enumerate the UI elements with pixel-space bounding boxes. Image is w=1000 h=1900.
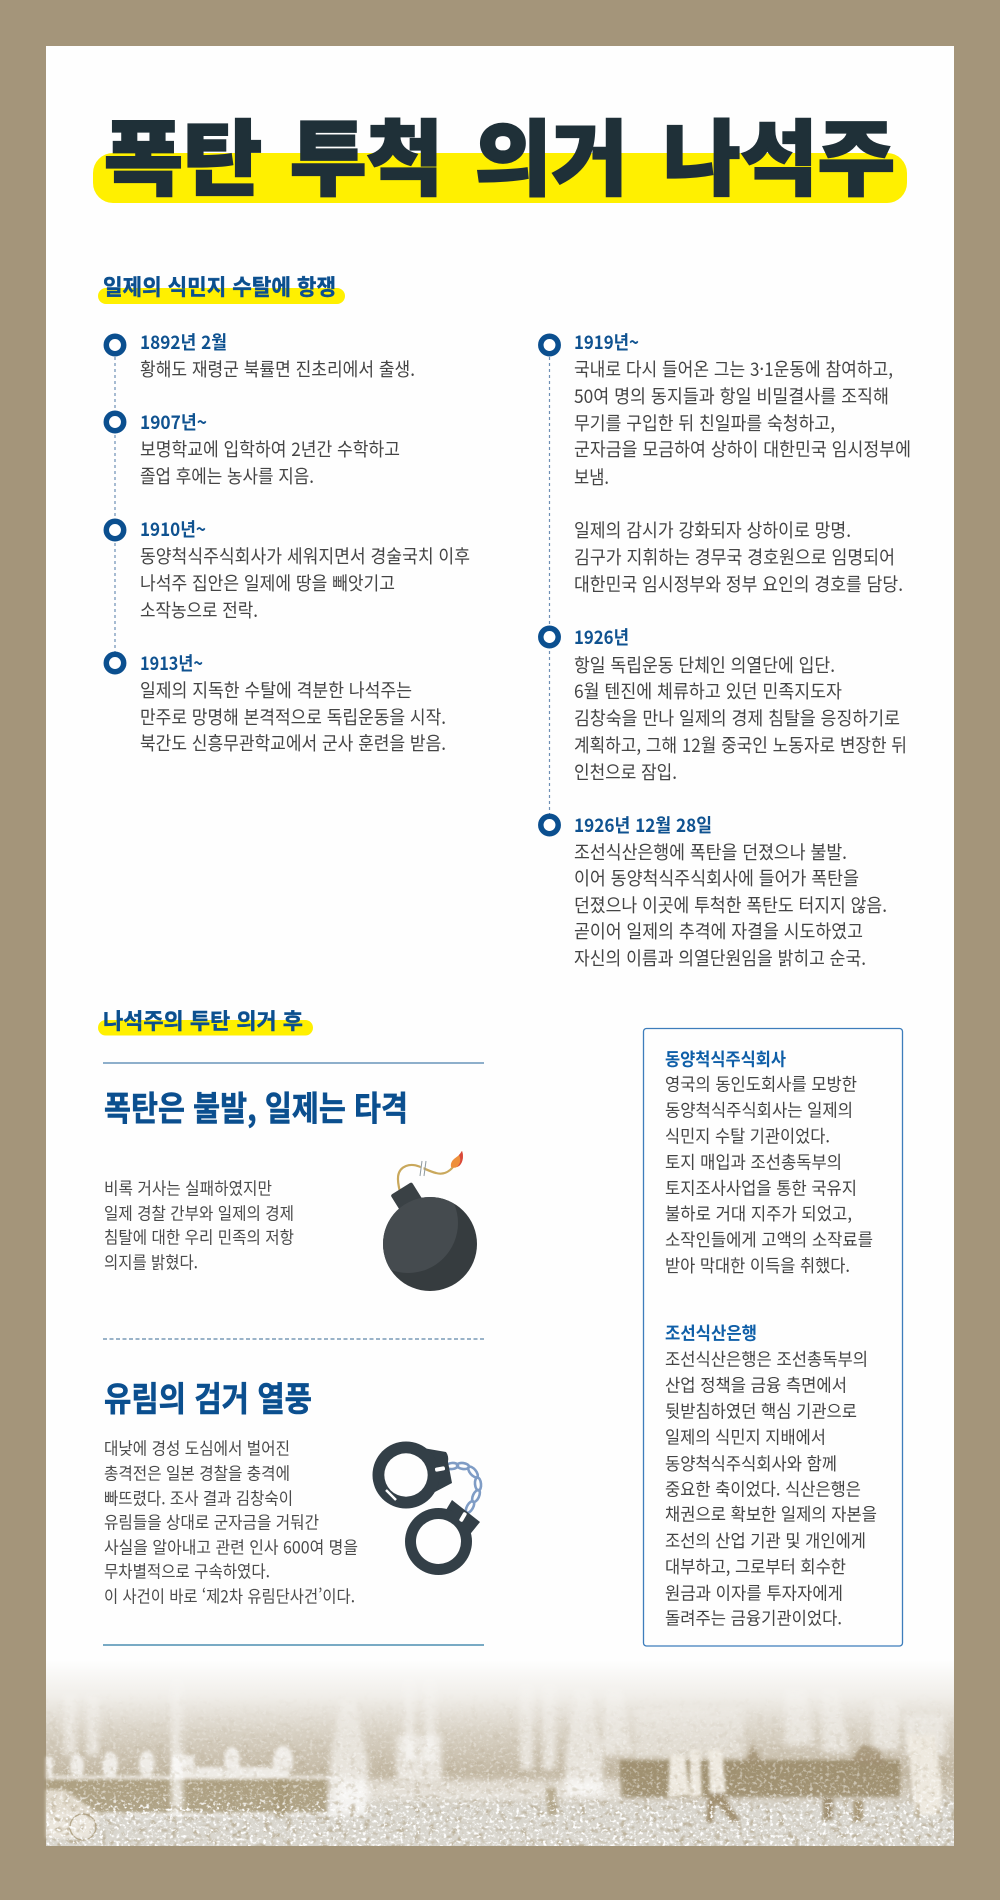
timeline item: 1907: 보명학교에 입학하여 2년간 수학하고 bbox=[140, 436, 400, 462]
timeline item: 1926-12-28: 곧이어 일제의 추격에 자결을 시도하였고 bbox=[574, 918, 863, 944]
glossary: Chosen Industrial Bank: 원금과 이자를 투자자에게 bbox=[665, 1580, 843, 1606]
timeline item: 1926: 6월 텐진에 체류하고 있던 민족지도자 bbox=[574, 678, 842, 704]
timeline item: 1919: 보냄. bbox=[574, 464, 609, 490]
text block: 유림들을 상대로 군자금을 거둬간 bbox=[104, 1508, 319, 1534]
mottling bbox=[46, 1717, 954, 1846]
timeline item: 1926-12-28: 자신의 이름과 의열단원임을 밝히고 순국. bbox=[574, 945, 866, 971]
timeline item: 1926: 항일 독립운동 단체인 의열단에 입단. bbox=[574, 652, 835, 678]
text block: 대낮에 경성 도심에서 벌어진 bbox=[104, 1434, 290, 1460]
glossary: Chosen Industrial Bank: 조선식산은행 bbox=[665, 1320, 757, 1346]
glossary: Chosen Industrial Bank: 대부하고, 그로부터 회수한 bbox=[665, 1554, 846, 1579]
title: 투척 bbox=[290, 93, 443, 212]
glossary: Chosen Industrial Bank: 뒷받침하였던 핵심 기관으로 bbox=[665, 1398, 857, 1424]
glossary: Oriental Development Company: 토지조사사업을 통한 국유지 bbox=[665, 1176, 857, 1200]
panel: glossary box bbox=[644, 1028, 902, 1646]
panel: timeline right column bbox=[541, 329, 911, 971]
timeline item: 1907: 1907년~ bbox=[140, 409, 207, 435]
timeline item: 1926-12-28 bbox=[541, 812, 887, 971]
text block: 의지를 밝혔다. bbox=[104, 1248, 198, 1274]
title: 폭탄 bbox=[104, 93, 262, 212]
timeline item: 1910: 소작농으로 전락. bbox=[140, 597, 258, 623]
timeline item: 1913: 1913년~ bbox=[140, 650, 203, 676]
icon: handcuffs bbox=[372, 1442, 482, 1575]
text block: 이 사건이 바로 ‘제2차 유림단사건’이다. bbox=[104, 1582, 355, 1608]
timeline item: 1919: 일제의 감시가 강화되자 상하이로 망명. bbox=[574, 517, 851, 543]
glossary: Chosen Industrial Bank: 돌려주는 금융기관이었다. bbox=[665, 1606, 842, 1630]
glossary: Chosen Industrial Bank: 산업 정책을 금융 측면에서 bbox=[665, 1372, 847, 1398]
text block: 총격전은 일본 경찰을 충격에 bbox=[104, 1460, 290, 1484]
title: 의거 bbox=[475, 93, 628, 212]
glossary: Chosen Industrial Bank: 중요한 축이었다. 식산은행은 bbox=[665, 1476, 861, 1502]
text block: 일제 경찰 간부와 일제의 경제 bbox=[104, 1200, 294, 1224]
fence finials bbox=[46, 1746, 338, 1779]
timeline item: 1907: 졸업 후에는 농사를 지음. bbox=[140, 463, 314, 489]
timeline item: 1919: 1919년~ bbox=[574, 329, 639, 355]
dark wall and hedge blocks bbox=[46, 1745, 900, 1813]
timeline item: 1892: 황해도 재령군 북률면 진초리에서 출생. bbox=[140, 356, 415, 382]
glossary: Chosen Industrial Bank: 조선의 산업 기관 및 개인에게 bbox=[665, 1528, 866, 1553]
glossary: Oriental Development Company bbox=[665, 1046, 873, 1278]
text block bbox=[104, 1174, 294, 1274]
panel: timeline left column bbox=[106, 329, 470, 756]
panel: bomb failed, Japan struck bbox=[104, 1082, 477, 1291]
heading: 일제의 식민지 수탈에 항쟁: 일제의 식민지 수탈에 항쟁 bbox=[103, 270, 336, 302]
timeline item: 1926-12-28: 1926년 12월 28일 bbox=[574, 812, 712, 838]
timeline item: 1892: 1892년 2월 bbox=[140, 329, 227, 355]
text block: 비록 거사는 실패하였지만 bbox=[104, 1174, 272, 1200]
subheading: 폭탄은 불발, 일제는 타격 bbox=[104, 1082, 408, 1130]
timeline item: 1910: 동양척식주식회사가 세워지면서 경술국치 이후 bbox=[140, 543, 470, 569]
glossary: Chosen Industrial Bank: 채권으로 확보한 일제의 자본을 bbox=[665, 1502, 877, 1526]
timeline item: 1926-12-28: 조선식산은행에 폭탄을 던졌으나 불발. bbox=[574, 839, 847, 865]
text block: 무차별적으로 구속하였다. bbox=[104, 1558, 270, 1582]
timeline item: 1907 bbox=[106, 409, 400, 489]
glossary: Oriental Development Company: 불하로 거대 지주가 되었고, bbox=[665, 1201, 852, 1226]
glossary: Oriental Development Company: 영국의 동인도회사를 모방한 bbox=[665, 1072, 857, 1096]
text block: 침탈에 대한 우리 민족의 저항 bbox=[104, 1224, 294, 1248]
timeline item: 1913 bbox=[106, 650, 446, 756]
title: 나석주 bbox=[663, 93, 895, 212]
panel: mass arrests of Confucians bbox=[104, 1372, 482, 1608]
icon: bomb bbox=[383, 1151, 477, 1291]
text block bbox=[104, 1434, 358, 1608]
glossary: Chosen Industrial Bank: 동양척식주식회사와 함께 bbox=[665, 1451, 837, 1476]
timeline item: 1910 bbox=[106, 516, 470, 623]
glossary: Oriental Development Company: 토지 매입과 조선총독부의 bbox=[665, 1150, 842, 1174]
timeline item: 1919: 무기를 구입한 뒤 친일파를 숙청하고, bbox=[574, 410, 835, 436]
glossary: Chosen Industrial Bank: 조선식산은행은 조선총독부의 bbox=[665, 1346, 868, 1372]
pale pillars and buildings bbox=[64, 1668, 945, 1815]
glossary: Oriental Development Company: 동양척식주식회사는 일제의 bbox=[665, 1098, 853, 1122]
subheading: 유림의 검거 열풍 bbox=[104, 1372, 312, 1421]
title bbox=[93, 93, 907, 212]
timeline item: 1910: 1910년~ bbox=[140, 516, 206, 542]
timeline item: 1926: 1926년 bbox=[574, 624, 629, 650]
text block: 사실을 알아내고 관련 인사 600여 명을 bbox=[104, 1534, 358, 1558]
timeline item: 1926 bbox=[541, 624, 907, 785]
timeline item: 1913: 만주로 망명해 본격적으로 독립운동을 시작. bbox=[140, 704, 446, 730]
glossary: Chosen Industrial Bank: 일제의 식민지 지배에서 bbox=[665, 1424, 826, 1450]
text block: 빠뜨렸다. 조사 결과 김창숙이 bbox=[104, 1484, 293, 1510]
timeline item: 1926-12-28: 이어 동양척식주식회사에 들어가 폭탄을 bbox=[574, 865, 859, 891]
glossary: Oriental Development Company: 받아 막대한 이득을 취했다. bbox=[665, 1253, 850, 1278]
glossary: Oriental Development Company: 동양척식주식회사 bbox=[665, 1046, 786, 1072]
timeline item: 1919: 국내로 다시 들어온 그는 3·1운동에 참여하고, bbox=[574, 356, 893, 382]
timeline item: 1919: 김구가 지휘하는 경무국 경호원으로 임명되어 bbox=[574, 544, 895, 570]
timeline item: 1892 bbox=[106, 329, 415, 382]
glossary: Chosen Industrial Bank bbox=[665, 1320, 877, 1630]
timeline item: 1926-12-28: 던졌으나 이곳에 투척한 폭탄도 터지지 않음. bbox=[574, 892, 887, 918]
timeline item: 1919: 군자금을 모금하여 상하이 대한민국 임시정부에 bbox=[574, 436, 911, 462]
figures bbox=[272, 1735, 942, 1824]
historic street photo band bbox=[46, 1660, 954, 1846]
ground line and cart bbox=[46, 1790, 340, 1838]
wheel of cart bbox=[70, 1814, 96, 1840]
glossary: Oriental Development Company: 식민지 수탈 기관이었다. bbox=[665, 1124, 830, 1148]
timeline item: 1919: 50여 명의 동지들과 항일 비밀결사를 조직해 bbox=[574, 383, 889, 409]
timeline item: 1919 bbox=[541, 329, 911, 597]
timeline item: 1926: 인천으로 잠입. bbox=[574, 759, 677, 785]
timeline item: 1926: 김창숙을 만나 일제의 경제 침탈을 응징하기로 bbox=[574, 705, 900, 731]
timeline item: 1913: 일제의 지독한 수탈에 격분한 나석주는 bbox=[140, 677, 412, 703]
heading: 나석주의 투탄 의거 후: 나석주의 투탄 의거 후 bbox=[103, 1004, 303, 1036]
timeline item: 1926: 계획하고, 그해 12월 중국인 노동자로 변장한 뒤 bbox=[574, 732, 907, 758]
timeline item: 1913: 북간도 신흥무관학교에서 군사 훈련을 받음. bbox=[140, 730, 446, 756]
timeline item: 1919: 대한민국 임시정부와 정부 요인의 경호를 담당. bbox=[574, 571, 903, 597]
timeline item: 1910: 나석주 집안은 일제에 땅을 빼앗기고 bbox=[140, 570, 395, 596]
glossary: Oriental Development Company: 소작인들에게 고액의 소작료를 bbox=[665, 1227, 873, 1252]
